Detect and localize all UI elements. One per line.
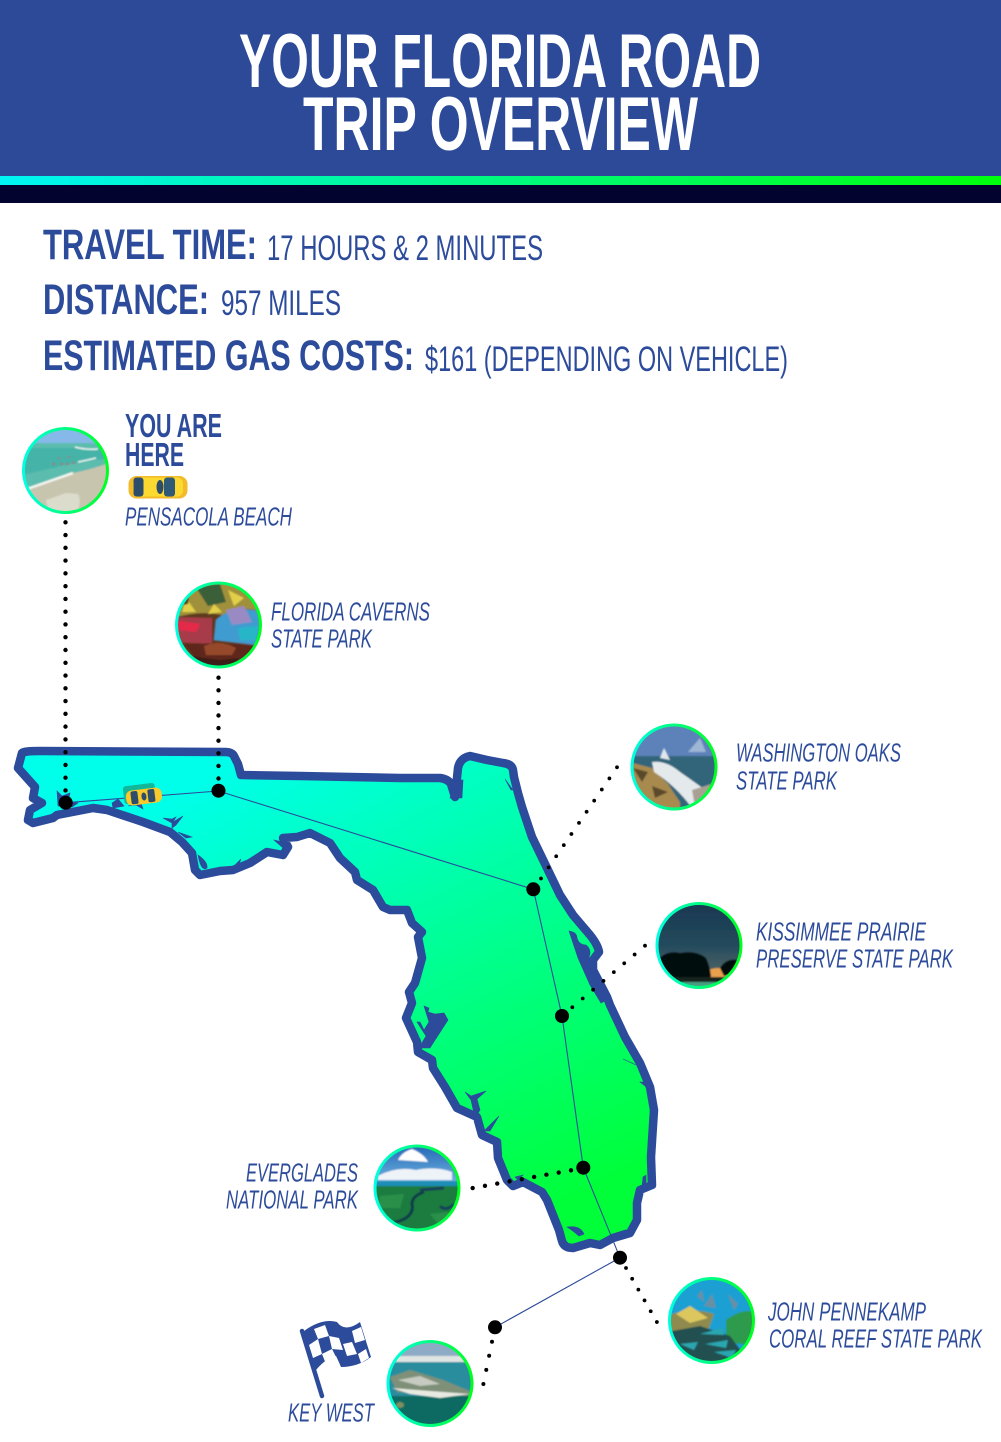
label: you are here	[125, 407, 222, 473]
pin: Key West	[288, 1321, 476, 1428]
photo: coral reef	[671, 1280, 752, 1361]
label: Everglades: EVERGLADES	[246, 1158, 358, 1188]
photo ring	[670, 1278, 754, 1362]
photo ring	[657, 904, 741, 988]
icon: checkered flag	[302, 1321, 371, 1396]
photo ring	[24, 428, 108, 512]
photo: caverns	[178, 584, 259, 666]
label: Washington Oaks: STATE PARK	[736, 766, 838, 796]
header band	[0, 0, 1001, 203]
icon: car on map	[123, 782, 163, 806]
photo: key west aerial	[390, 1343, 470, 1424]
pin: Pensacola Beach	[22, 414, 292, 526]
label: Florida Caverns	[271, 596, 430, 654]
photo ring	[176, 583, 260, 667]
label: Key West: KEY WEST	[288, 1398, 375, 1428]
label: you are here: YOU ARE	[125, 407, 222, 444]
pin: Everglades	[226, 1143, 462, 1234]
Florida map	[18, 751, 654, 1248]
label: John Pennekamp	[767, 1296, 983, 1354]
label: Everglades: NATIONAL PARK	[226, 1184, 359, 1214]
pin: John Pennekamp	[667, 1276, 983, 1366]
label: Washington Oaks	[736, 738, 901, 796]
distance: 957 MILES	[221, 284, 341, 323]
pin: Kissimmee Prairie	[654, 901, 954, 991]
estimated gas costs: $161 (DEPENDING ON VEHICLE)	[425, 340, 788, 379]
estimated gas costs: ESTIMATED GAS COSTS:	[43, 332, 414, 380]
route stops	[59, 784, 627, 1334]
pin: Florida Caverns	[173, 580, 430, 672]
travel time: 17 HOURS & 2 MINUTES	[267, 229, 543, 268]
label: Florida Caverns: FLORIDA CAVERNS	[271, 596, 430, 626]
icon: yellow car	[128, 476, 188, 498]
bays and inlets	[57, 779, 648, 1238]
label: Kissimmee Prairie	[756, 916, 954, 974]
title: TRIP OVERVIEW	[303, 82, 698, 167]
travel time: TRAVEL TIME:	[43, 221, 257, 269]
photo: beach	[25, 430, 106, 511]
distance: DISTANCE:	[43, 276, 209, 324]
travel time	[43, 221, 543, 269]
route lines	[66, 791, 620, 1327]
trip stats	[43, 221, 788, 380]
title	[239, 19, 761, 167]
photo ring	[632, 725, 716, 809]
dotted connectors	[66, 522, 658, 1386]
photo ring	[375, 1146, 459, 1230]
pin: Washington Oaks	[629, 722, 901, 814]
photo: everglades	[376, 1148, 458, 1228]
photo: night sky	[658, 905, 740, 986]
label: Florida Caverns: STATE PARK	[271, 624, 373, 654]
label: Washington Oaks: WASHINGTON OAKS	[736, 738, 901, 768]
photo ring	[388, 1342, 472, 1426]
label: Everglades	[226, 1158, 359, 1214]
photo: waves on rocks	[634, 726, 714, 808]
label: Pensacola Beach: PENSACOLA BEACH	[125, 502, 292, 532]
label: you are here: HERE	[125, 436, 184, 473]
